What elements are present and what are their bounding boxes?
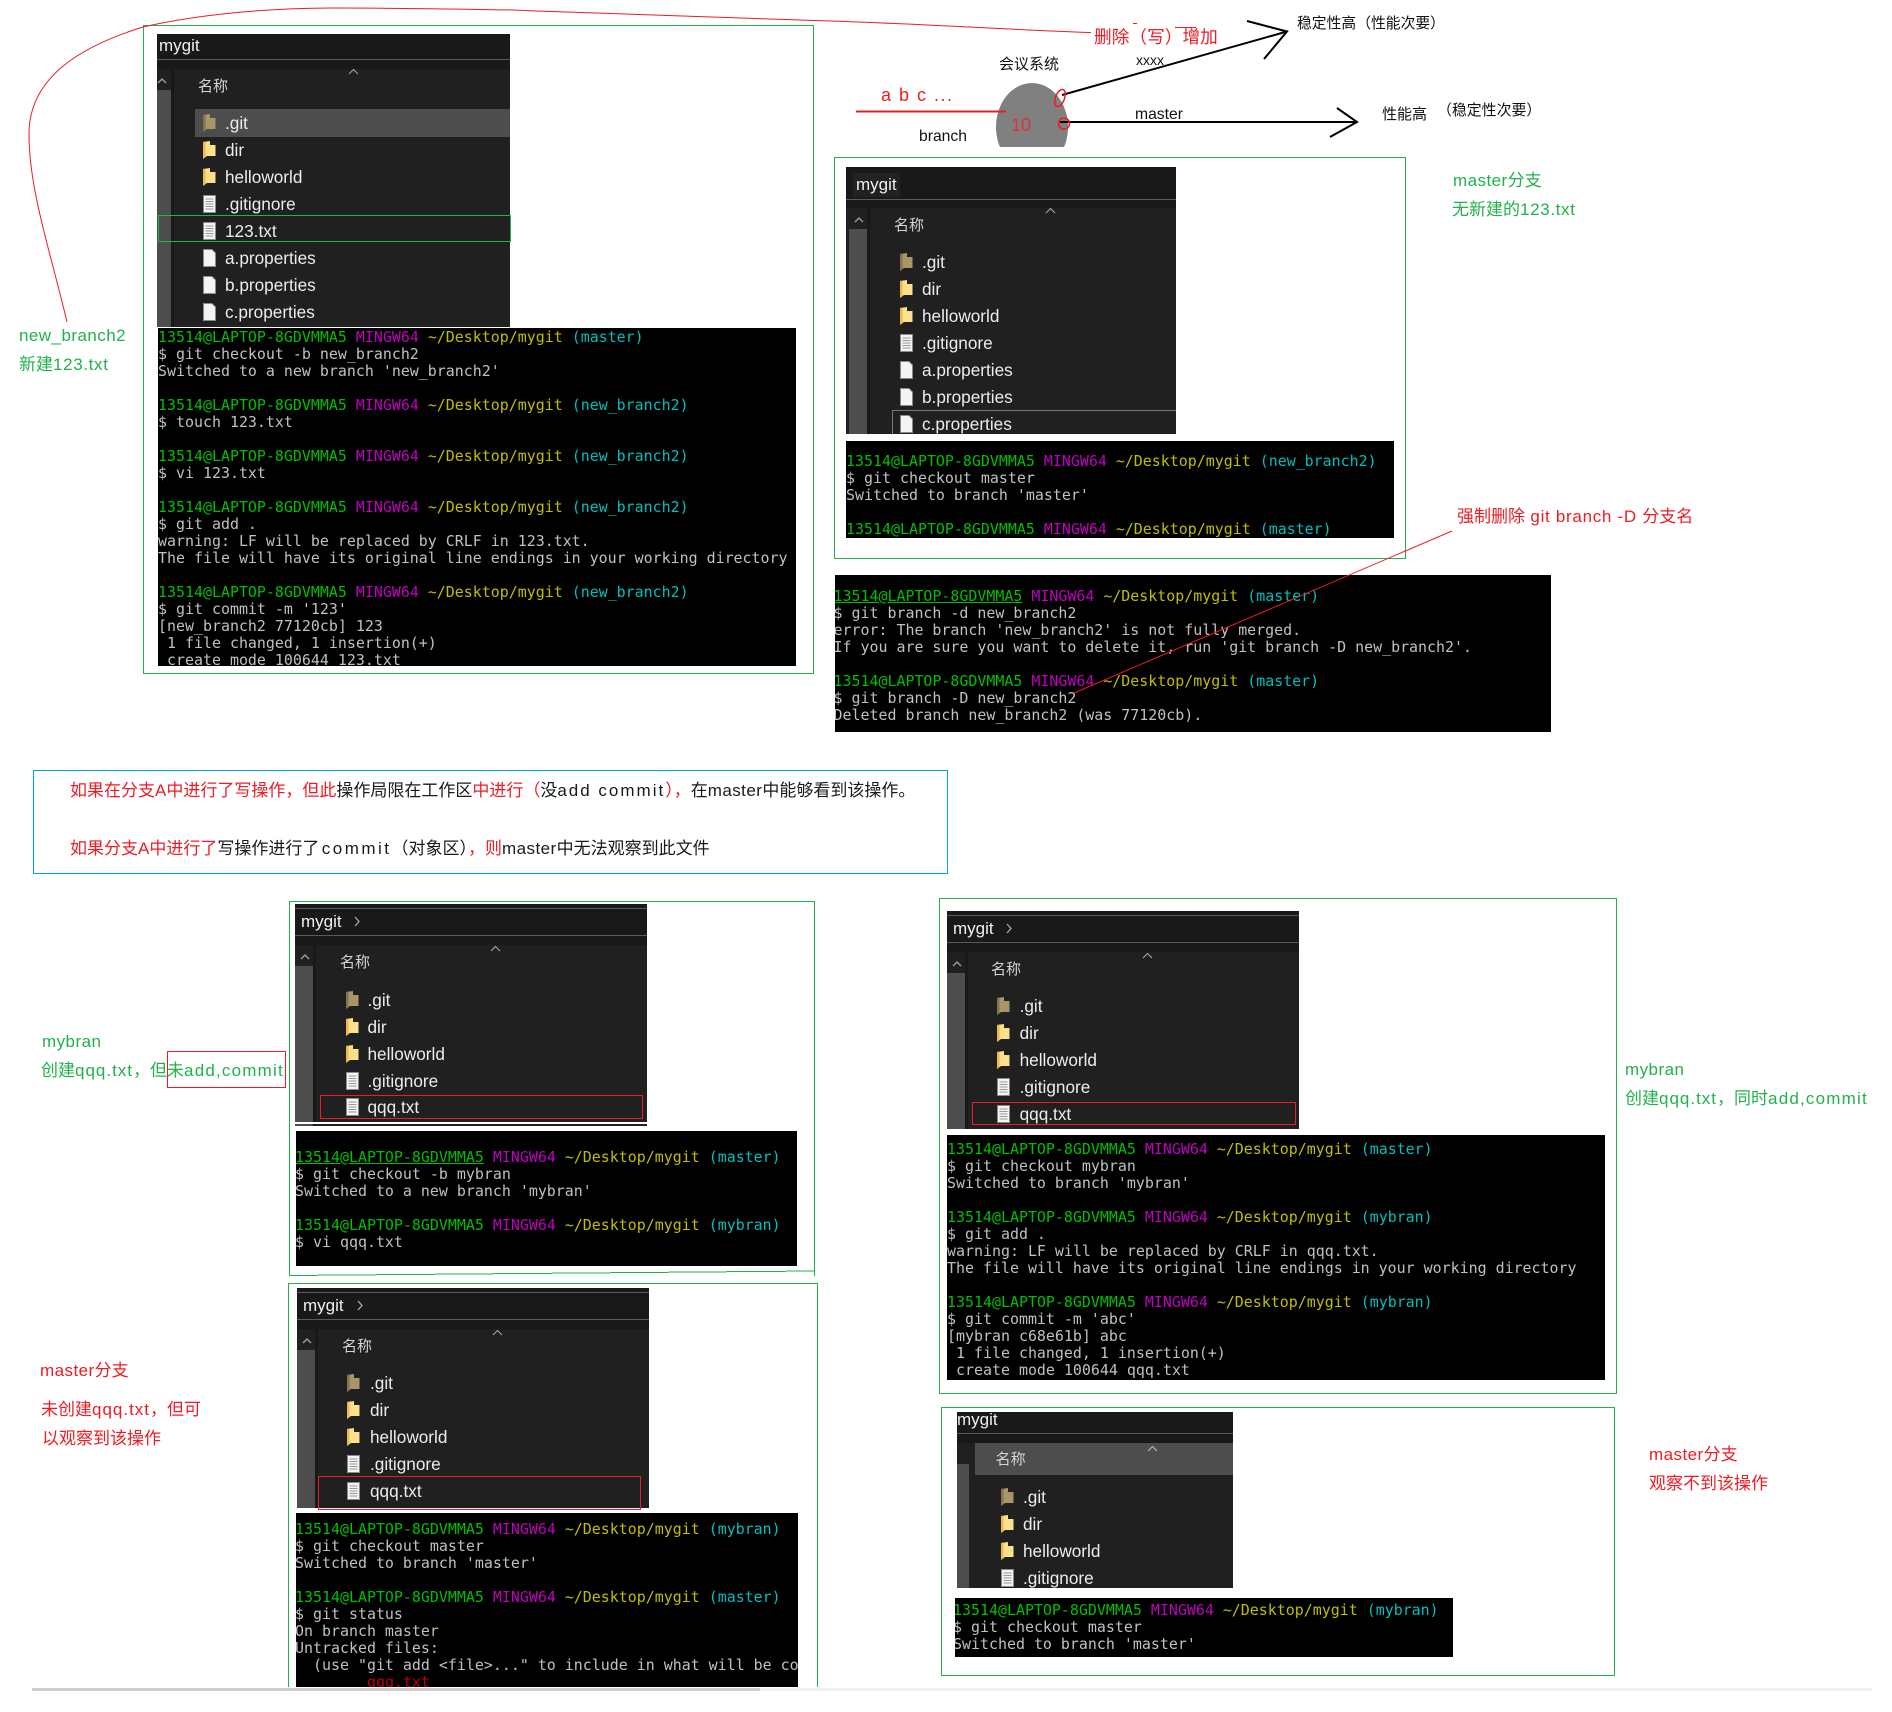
file explorer: mygit on master with qqq.txt <box>297 1288 649 1508</box>
file explorer: mygit with qqq.txt <box>947 911 1299 1129</box>
row: c.properties: c.properties <box>225 302 315 322</box>
gray circle node <box>996 83 1068 147</box>
row: dir <box>900 279 941 299</box>
label: new_branch2: new_branch2 <box>19 326 126 345</box>
arrow: stable branch <box>1062 21 1287 95</box>
row: helloworld: helloworld <box>1020 1050 1097 1070</box>
label: master分支: master分支 <box>1453 171 1542 190</box>
panel: master sees uncommitted file <box>288 1283 818 1687</box>
row: .git <box>346 990 390 1010</box>
row: dir <box>346 1016 387 1036</box>
row: .gitignore: .gitignore <box>368 1070 438 1090</box>
row: dir <box>347 1400 389 1420</box>
label: 稳定性高（性能次要）: 稳定性高（性能次要） <box>1297 15 1445 32</box>
row: helloworld <box>957 1538 1233 1565</box>
row: .git: .git <box>1023 1487 1046 1507</box>
row: helloworld <box>947 1047 1299 1074</box>
label: 无新建的123.txt: 无新建的123.txt <box>1452 200 1576 219</box>
column header: 名称 <box>340 954 370 971</box>
red highlight box on qqq.txt <box>972 1102 1296 1125</box>
terminal: delete branch: 13514@LAPTOP-8GDVMMA5 MINGW64 ~/Desktop/mygit (master) $ git branch -d new_branch2 error: The branch 'new_branch2' is not fully merged. If you are sure you want to delete it, run 'git branch -D new_branch2'. 13514@LAPTOP-8GDVMMA5 MINGW64 ~/Desktop/mygit (master) $ git branch -D new_branch2 Deleted branch new_branch2 (was 77120cb). <box>835 586 1472 724</box>
label: 新建123.txt: 新建123.txt <box>19 355 109 374</box>
red pointer line from 强制删除 label <box>1074 531 1452 693</box>
row: dir: dir <box>368 1016 387 1036</box>
row: .git: .git <box>368 990 390 1010</box>
label: 删除（写）增加: 删除（写）增加 <box>1094 27 1218 47</box>
row: qqq.txt: qqq.txt <box>368 1097 419 1117</box>
row: .git <box>997 996 1043 1016</box>
red marks on node <box>1053 88 1070 129</box>
row: dir: dir <box>1020 1023 1039 1043</box>
breadcrumb chevron <box>1006 924 1012 934</box>
row: helloworld: helloworld <box>370 1427 447 1447</box>
terminal: checkout new_branch2 and commit: 13514@LAPTOP-8GDVMMA5 MINGW64 ~/Desktop/mygit (master) $ git checkout -b new_branch2 Switched to a new branch 'new_branch2' 13514@LAPTOP-8GDVMMA5 MINGW64 ~/Desktop/mygit (new_branch2) $ touch 123.txt 13514@LAPTOP-8GDVMMA5 MINGW64 ~/Desktop/mygit (new_branch2) $ vi 123.txt 13514@LAPTOP-8GDVMMA5 MINGW64 ~/Desktop/mygit (new_branch2) $ git add . warning: LF will be replaced by CRLF in 123.txt. The file will have its original line endings in your working directory 13514@LAPTOP-8GDVMMA5 MINGW64 ~/Desktop/mygit (new_branch2) $ git commit -m '123' [new_branch2 77120cb] 123 1 file changed, 1 insertion(+) create mode 100644 123.txt <box>158 328 788 666</box>
window title: mygit <box>301 912 342 931</box>
label: master: master <box>1135 106 1183 123</box>
label: 10: 10 <box>1011 115 1031 135</box>
window title: mygit <box>303 1296 344 1315</box>
terminal: checkout master: 13514@LAPTOP-8GDVMMA5 MINGW64 ~/Desktop/mygit (new_branch2) $ git checkout master Switched to branch 'master' 13514@LAPTOP-8GDVMMA5 MINGW64 ~/Desktop/mygit (master) <box>846 452 1377 538</box>
label: xxxx: xxxx <box>1136 52 1164 68</box>
panel: mybran without commit <box>289 901 815 1276</box>
red fragments above 删除 label <box>1133 24 1196 28</box>
diagram: branch concept sketch <box>856 15 1540 147</box>
panel: master branch has no 123.txt <box>834 157 1406 559</box>
row: helloworld: helloworld <box>922 306 999 326</box>
row: .gitignore <box>957 1565 1233 1592</box>
callout: summary of write operations <box>33 770 948 874</box>
breadcrumb chevron <box>354 916 360 926</box>
row: c.properties: c.properties <box>922 414 1012 434</box>
row: dir: dir <box>922 279 941 299</box>
label: a b c: a b c ... <box>881 85 954 105</box>
row: qqq.txt <box>347 1481 422 1501</box>
row: dir: dir <box>1023 1514 1042 1534</box>
label: 性能高: 性能高 <box>1382 106 1427 123</box>
row: .gitignore: .gitignore <box>922 333 993 353</box>
row: dir <box>947 1020 1299 1047</box>
row: .git <box>203 113 248 133</box>
row: dir: dir <box>225 140 244 160</box>
red highlight box on qqq.txt <box>320 1095 643 1119</box>
label: 观察不到该操作: 观察不到该操作 <box>1649 1474 1768 1493</box>
window title: mygit <box>159 36 200 55</box>
arrow: master branch <box>1060 108 1357 137</box>
selected row highlight <box>195 109 510 137</box>
column header: 名称 <box>991 961 1021 978</box>
row: helloworld: helloworld <box>368 1044 445 1064</box>
row: qqq.txt <box>947 1101 1299 1128</box>
label: 未创建qqq.txt，但可: 未创建qqq.txt，但可 <box>41 1400 201 1419</box>
row: .gitignore <box>947 1074 1299 1101</box>
label: 强制删除: 强制删除 git branch -D 分支名 <box>1457 507 1693 526</box>
callout line 1: 如果在分支A中进行了写操作，但此操作局限在工作区中进行（没add commit），在master中能够看到该操作。 <box>70 781 915 800</box>
window title <box>853 173 900 197</box>
row: helloworld: helloworld <box>225 167 302 187</box>
row: .gitignore: .gitignore <box>1023 1568 1094 1588</box>
window title: mygit <box>953 919 994 938</box>
label: 以观察到该操作: 以观察到该操作 <box>42 1429 161 1448</box>
row: .git <box>347 1373 393 1393</box>
green highlight box on 123.txt <box>158 215 511 242</box>
row: a.properties: a.properties <box>922 360 1013 380</box>
red curve from new_branch2 to 删除 label <box>29 8 1091 322</box>
label: mybran (right): mybran <box>1625 1060 1684 1079</box>
red line: a b c commits <box>856 110 1006 112</box>
label: 创建qqq.txt，同时add,commit: 创建qqq.txt，同时add,commit <box>1625 1089 1868 1108</box>
label: master分支 (right red): master分支 <box>1649 1445 1738 1464</box>
row: dir <box>203 140 244 160</box>
panel: master cannot see committed file <box>941 1407 1615 1676</box>
row: .gitignore: .gitignore <box>370 1454 441 1474</box>
row: .gitignore: .gitignore <box>1020 1077 1090 1097</box>
label: 会议系统: 会议系统 <box>999 56 1059 73</box>
row: a.properties: a.properties <box>225 248 316 268</box>
red highlight box on qqq.txt <box>318 1476 641 1510</box>
label: （稳定性次要）: （稳定性次要） <box>1437 102 1540 119</box>
row: helloworld: helloworld <box>1023 1541 1100 1561</box>
file explorer: mygit with qqq.txt <box>295 904 647 1126</box>
label: branch: branch <box>919 128 967 145</box>
row: b.properties: b.properties <box>922 387 1013 407</box>
column header: 名称 <box>996 1451 1026 1468</box>
terminal: checkout -b mybran: 13514@LAPTOP-8GDVMMA5 MINGW64 ~/Desktop/mygit (master) $ git checkout -b mybran Switched to a new branch 'mybran' 13514@LAPTOP-8GDVMMA5 MINGW64 ~/Desktop/mygit (mybran) $ vi qqq.txt <box>296 1148 781 1250</box>
file explorer: mygit without 123.txt <box>846 167 1176 434</box>
row: .git: .git <box>370 1373 393 1393</box>
window title: mygit <box>856 175 897 194</box>
focus outline on c.properties <box>892 410 1176 434</box>
column header: 名称 <box>342 1338 372 1355</box>
row: .git <box>957 1484 1233 1511</box>
row: qqq.txt: qqq.txt <box>370 1481 422 1501</box>
file explorer: mygit on master without qqq.txt <box>957 1412 1233 1588</box>
column header: 名称 <box>198 78 228 95</box>
header band <box>975 1443 1233 1475</box>
terminal: add and commit on mybran: 13514@LAPTOP-8GDVMMA5 MINGW64 ~/Desktop/mygit (master) $ git checkout mybran Switched to branch 'mybran' 13514@LAPTOP-8GDVMMA5 MINGW64 ~/Desktop/mygit (mybran) $ git add . warning: LF will be replaced by CRLF in qqq.txt. The file will have its original line endings in your working directory 13514@LAPTOP-8GDVMMA5 MINGW64 ~/Desktop/mygit (mybran) $ git commit -m 'abc' [mybran c68e61b] abc 1 file changed, 1 insertion(+) create mode 100644 qqq.txt <box>947 1140 1577 1378</box>
label: master分支 (red): master分支 <box>40 1361 129 1380</box>
label: mybran: mybran <box>42 1032 101 1051</box>
row: b.properties: b.properties <box>225 275 316 295</box>
row: .git <box>900 252 945 272</box>
scrollbar <box>32 1688 1872 1691</box>
row: dir <box>957 1511 1233 1538</box>
row: dir: dir <box>370 1400 389 1420</box>
red highlight box: 未add,commit <box>167 1051 286 1088</box>
label: 创建qqq.txt，但未add,commit: 创建qqq.txt，但未add,commit <box>41 1061 284 1080</box>
panel: mybran with add and commit <box>939 898 1617 1394</box>
row: qqq.txt: qqq.txt <box>1020 1104 1071 1124</box>
row: .git: .git <box>1020 996 1043 1016</box>
row: .git: .git <box>922 252 945 272</box>
row: 123.txt <box>203 221 277 241</box>
row: .git: .git <box>225 113 248 133</box>
column header: 名称 <box>894 216 924 234</box>
row: .gitignore: .gitignore <box>225 194 296 214</box>
panel: new_branch2 creates 123.txt <box>143 25 814 674</box>
file explorer: mygit with 123.txt <box>157 34 510 327</box>
callout line 2: 如果分支A中进行了写操作进行了commit（对象区），则master中无法观察到此文件 <box>70 839 710 858</box>
breadcrumb chevron <box>358 1300 363 1310</box>
terminal: checkout master from mybran: 13514@LAPTOP-8GDVMMA5 MINGW64 ~/Desktop/mygit (mybran) $ git checkout master Switched to branch 'master' <box>955 1600 1439 1652</box>
row: 123.txt: 123.txt <box>225 221 277 241</box>
